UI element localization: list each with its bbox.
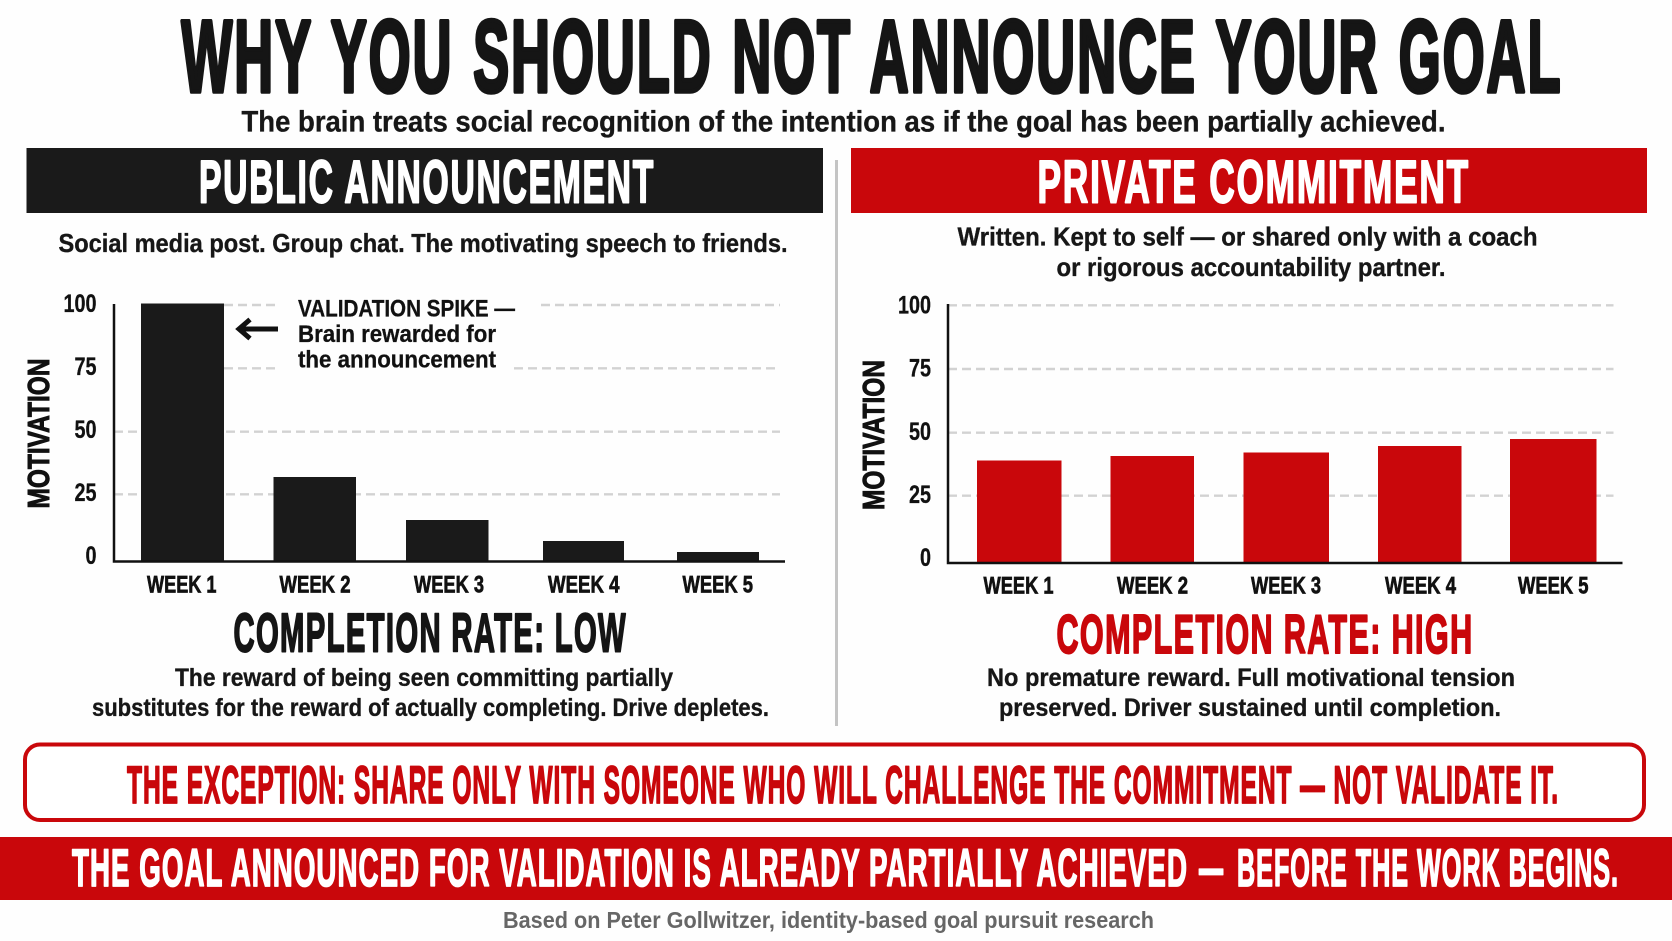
header bar: public announcement: PUBLIC ANNOUNCEMENT — [199, 148, 655, 216]
week labels: WEEK 2 — [280, 572, 350, 598]
y axis ticks: 100 — [64, 290, 96, 318]
y axis ticks: 75 — [74, 353, 97, 381]
week labels: WEEK 1 — [147, 572, 216, 598]
y axis label: MOTIVATION — [856, 360, 891, 510]
callout: validation spike: VALIDATION SPIKE — — [298, 296, 515, 322]
y axis ticks: 50 — [74, 416, 96, 444]
y axis ticks: 100 — [898, 292, 931, 320]
private description: or rigorous accountability partner. — [1056, 252, 1446, 282]
week labels: WEEK 1 — [984, 572, 1054, 600]
bars — [977, 439, 1596, 562]
banner: key takeaway: — — [1199, 839, 1224, 898]
week labels — [984, 572, 1588, 600]
panel divider — [835, 160, 838, 726]
week labels: WEEK 4 — [548, 572, 620, 598]
private explanation: No premature reward. Full motivational tension — [987, 664, 1515, 692]
week labels: WEEK 4 — [1385, 572, 1457, 600]
y axis label: MOTIVATION — [21, 358, 56, 508]
bars — [141, 304, 759, 560]
week labels: WEEK 3 — [1251, 572, 1321, 600]
axes — [114, 304, 785, 562]
axes — [948, 304, 1622, 563]
y axis ticks: 50 — [909, 418, 931, 446]
public explanation — [92, 664, 769, 722]
source footer: Based on Peter Gollwitzer, identity-based goal pursuit research — [503, 907, 1154, 933]
public explanation: The reward of being seen committing partially — [175, 664, 673, 692]
bar chart: public motivation by week — [21, 290, 785, 598]
private description — [958, 222, 1538, 282]
private description: Written. Kept to self — or shared only with a coach — [958, 222, 1538, 252]
completion rate: low: COMPLETION RATE: LOW — [234, 602, 627, 664]
y axis ticks: 0 — [920, 544, 931, 572]
y axis ticks: 25 — [909, 481, 931, 509]
week labels: WEEK 2 — [1117, 572, 1188, 600]
bar chart: private motivation by week — [856, 292, 1622, 600]
week labels: WEEK 5 — [682, 572, 753, 598]
y axis ticks: 75 — [909, 354, 931, 382]
header bar: public announcement — [26, 148, 823, 216]
y axis ticks — [64, 290, 97, 570]
callout: validation spike — [298, 296, 515, 374]
private explanation: preserved. Driver sustained until completion. — [999, 694, 1501, 722]
y axis ticks — [898, 292, 931, 572]
callout: validation spike: the announcement — [298, 346, 496, 374]
y axis ticks: 25 — [74, 479, 97, 507]
private explanation — [987, 664, 1515, 722]
panel: public announcement — [21, 148, 823, 722]
week labels — [147, 572, 753, 598]
subtitle: The brain treats social recognition of the intention as if the goal has been partially achieved. — [242, 106, 1446, 138]
week labels: WEEK 3 — [414, 572, 484, 598]
week labels: WEEK 5 — [1518, 572, 1588, 600]
y axis ticks: 0 — [86, 542, 96, 570]
panel: private commitment — [851, 148, 1647, 722]
public explanation: substitutes for the reward of actually completing. Drive depletes. — [92, 694, 769, 722]
callout: validation spike: Brain rewarded for — [298, 321, 496, 348]
public description: Social media post. Group chat. The motivating speech to friends. — [58, 228, 788, 258]
arrow: validation spike — [239, 320, 278, 338]
